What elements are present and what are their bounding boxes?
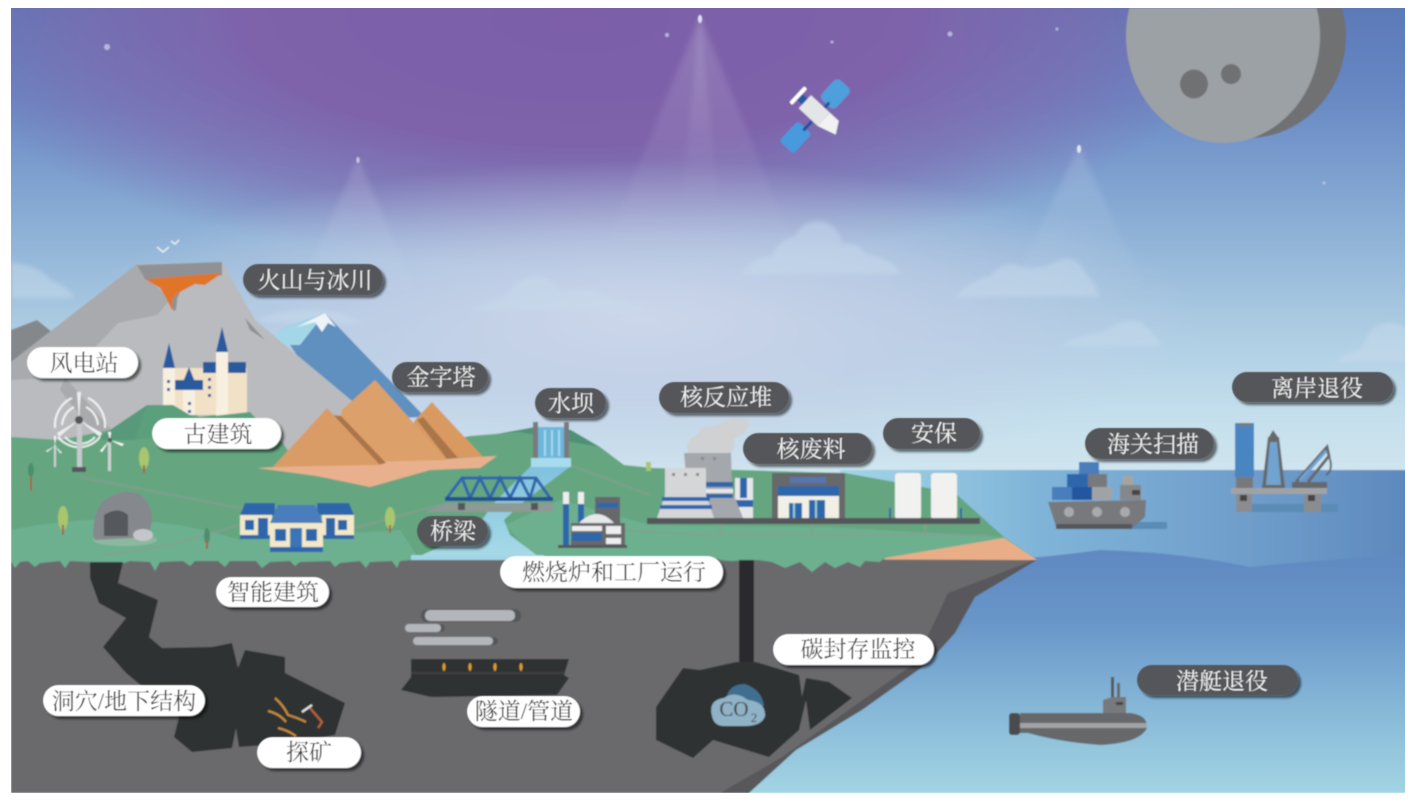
label: 风电站: 风电站	[50, 351, 118, 376]
nuclear waste building	[772, 473, 845, 519]
label: 智能建筑: 智能建筑	[227, 580, 319, 605]
label: 桥梁: 桥梁	[430, 519, 477, 544]
label: 潜艇退役	[1137, 665, 1298, 695]
pipes	[405, 609, 521, 645]
label: 探矿	[257, 737, 361, 768]
moon	[1126, 0, 1346, 143]
cave entrance	[93, 492, 157, 546]
label: 碳封存监控	[773, 634, 934, 665]
label: 智能建筑	[216, 577, 329, 607]
factory	[558, 492, 627, 548]
smart houses	[240, 503, 354, 552]
castle	[163, 327, 247, 416]
label: 碳封存监控: 碳封存监控	[800, 637, 916, 662]
birds	[157, 240, 179, 252]
label: 隧道/管道: 隧道/管道	[475, 699, 573, 724]
label: 核反应堆	[659, 382, 789, 413]
offshore rig	[1231, 423, 1338, 512]
power plant platform	[647, 518, 980, 524]
label: 核反应堆: 核反应堆	[680, 385, 772, 410]
river	[422, 466, 570, 556]
CO2 cloud: 2	[751, 710, 757, 725]
label: 火山与冰川	[243, 264, 383, 295]
label: 古建筑	[152, 418, 281, 449]
label: 燃烧炉和工厂运行	[500, 556, 723, 588]
CO2 cloud	[711, 684, 765, 726]
label: 核废料: 核废料	[776, 437, 846, 462]
label: 安保	[883, 418, 980, 449]
dam	[531, 422, 571, 467]
trees	[28, 447, 651, 549]
security tanks	[889, 473, 962, 519]
CO2 cloud: CO	[719, 697, 749, 721]
label: 核废料	[743, 433, 872, 464]
icon: satellite	[780, 78, 850, 153]
label: 金字塔: 金字塔	[406, 365, 476, 390]
stars	[104, 28, 1326, 184]
label: 潜艇退役: 潜艇退役	[1176, 669, 1268, 694]
label: 火山与冰川: 火山与冰川	[258, 268, 372, 293]
carbon storage chamber	[656, 560, 852, 758]
pyramids	[257, 380, 497, 487]
label: 桥梁	[417, 516, 488, 546]
label: 水坝: 水坝	[548, 391, 595, 416]
mountains	[11, 262, 425, 470]
label: 洞穴/地下结构: 洞穴/地下结构	[52, 689, 196, 714]
tunnel with lights	[401, 659, 569, 697]
label: 燃烧炉和工厂运行: 燃烧炉和工厂运行	[522, 560, 706, 585]
label: 安保: 安保	[911, 421, 957, 446]
label: 探矿: 探矿	[286, 740, 332, 765]
sea upper	[840, 470, 1410, 580]
label: 古建筑: 古建筑	[184, 422, 252, 447]
label: 水坝	[535, 388, 606, 418]
nuclear reactor	[657, 419, 753, 518]
wind turbines	[46, 392, 124, 472]
label: 金字塔	[392, 362, 488, 392]
land	[11, 405, 1037, 562]
volcano crater with lava	[137, 262, 222, 311]
green hill in front of castle	[135, 405, 262, 440]
label: 离岸退役: 离岸退役	[1271, 376, 1363, 401]
grass edge	[11, 556, 885, 572]
sky background	[0, 0, 1415, 488]
label: 海关扫描: 海关扫描	[1107, 432, 1199, 457]
label: 海关扫描	[1085, 428, 1214, 459]
underground rock	[11, 558, 1037, 793]
sea lower	[700, 550, 1410, 793]
water strip by land	[411, 555, 544, 560]
roads	[80, 465, 990, 555]
submarine	[1009, 677, 1147, 745]
mineral veins with pick	[268, 698, 322, 736]
light beams	[295, 15, 1150, 300]
label: 风电站	[27, 347, 138, 378]
cargo ship	[1048, 462, 1167, 529]
cave system	[90, 562, 345, 752]
clouds	[11, 221, 1410, 362]
label: 离岸退役	[1232, 372, 1393, 402]
bridge	[425, 478, 553, 512]
